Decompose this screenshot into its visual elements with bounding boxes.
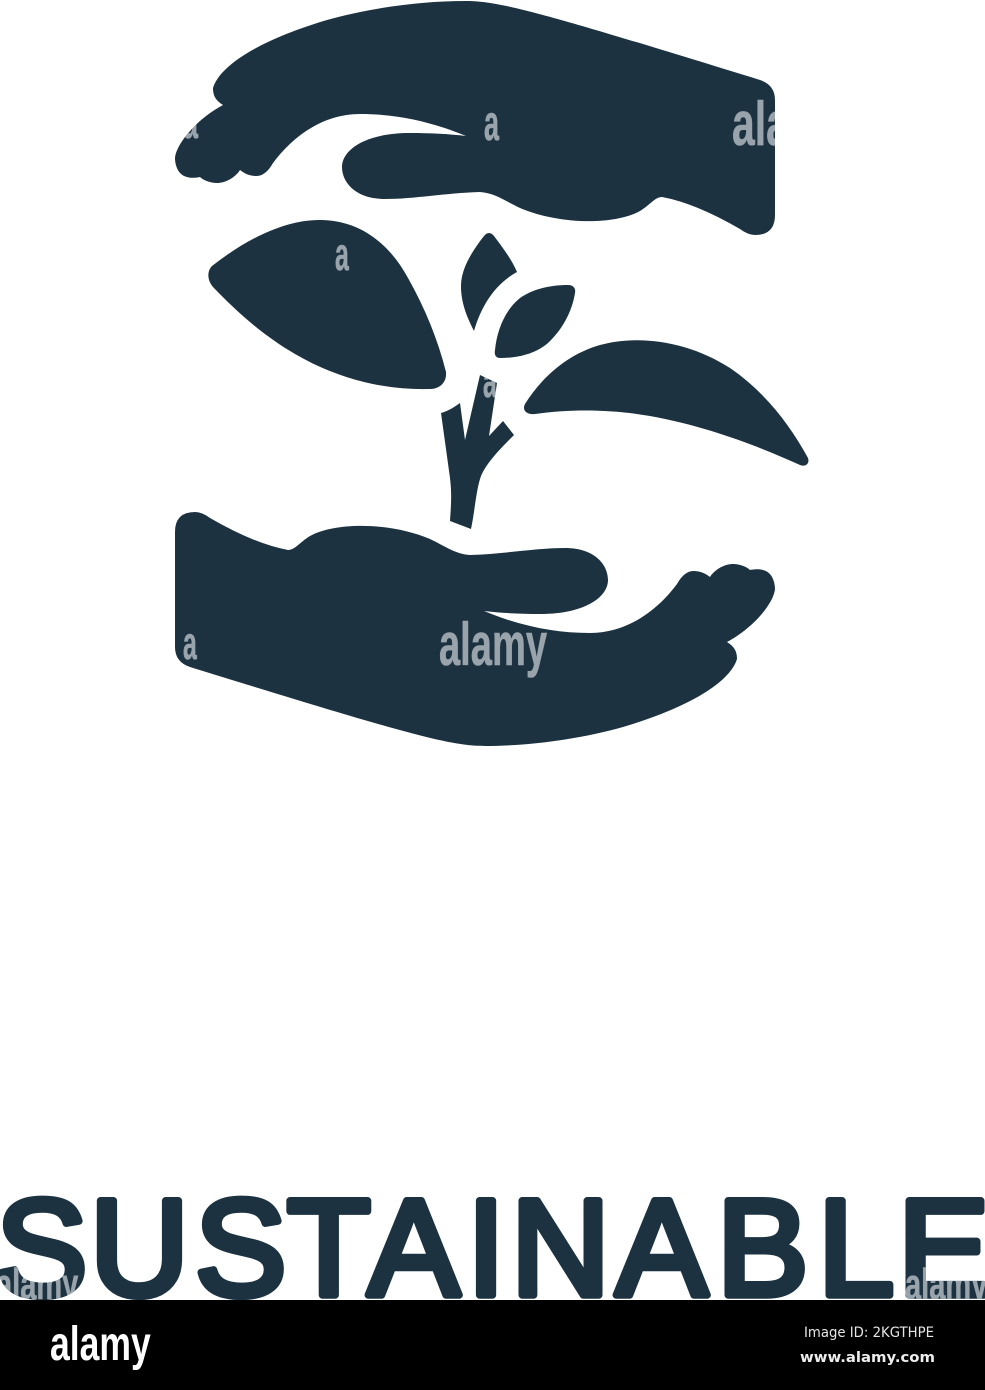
- title: SUSTAINABLE: [0, 1172, 985, 1325]
- title watermark fragments: alamy: [905, 1259, 985, 1308]
- image id: Image ID: 2KGTHPE: [804, 1325, 934, 1341]
- icon: plant stem: [441, 375, 514, 529]
- icon: large left leaf: [208, 220, 446, 389]
- watermark fragments: [183, 90, 848, 678]
- footer bar: [0, 1300, 985, 1390]
- icon: bottom hand: [175, 512, 775, 746]
- icon: sustainable hands and plant: [175, 1, 808, 746]
- watermark fragments: a: [483, 356, 497, 407]
- icon: top small leaf: [461, 233, 517, 331]
- icon: top hand: [175, 1, 775, 235]
- footer logo: alamy: [50, 1317, 151, 1370]
- watermark fragments: a: [183, 618, 197, 669]
- watermark fragments: a: [484, 95, 499, 151]
- title watermark fragments: [0, 1259, 985, 1308]
- watermark fragments: alamy: [439, 611, 547, 678]
- watermark fragments: a: [183, 93, 198, 149]
- website: www.alamy.com: [800, 1350, 935, 1366]
- watermark fragments: alamy: [732, 90, 848, 159]
- icon: right leaf: [524, 340, 808, 466]
- watermark fragments: a: [335, 229, 349, 280]
- icon: side small leaf: [495, 285, 575, 358]
